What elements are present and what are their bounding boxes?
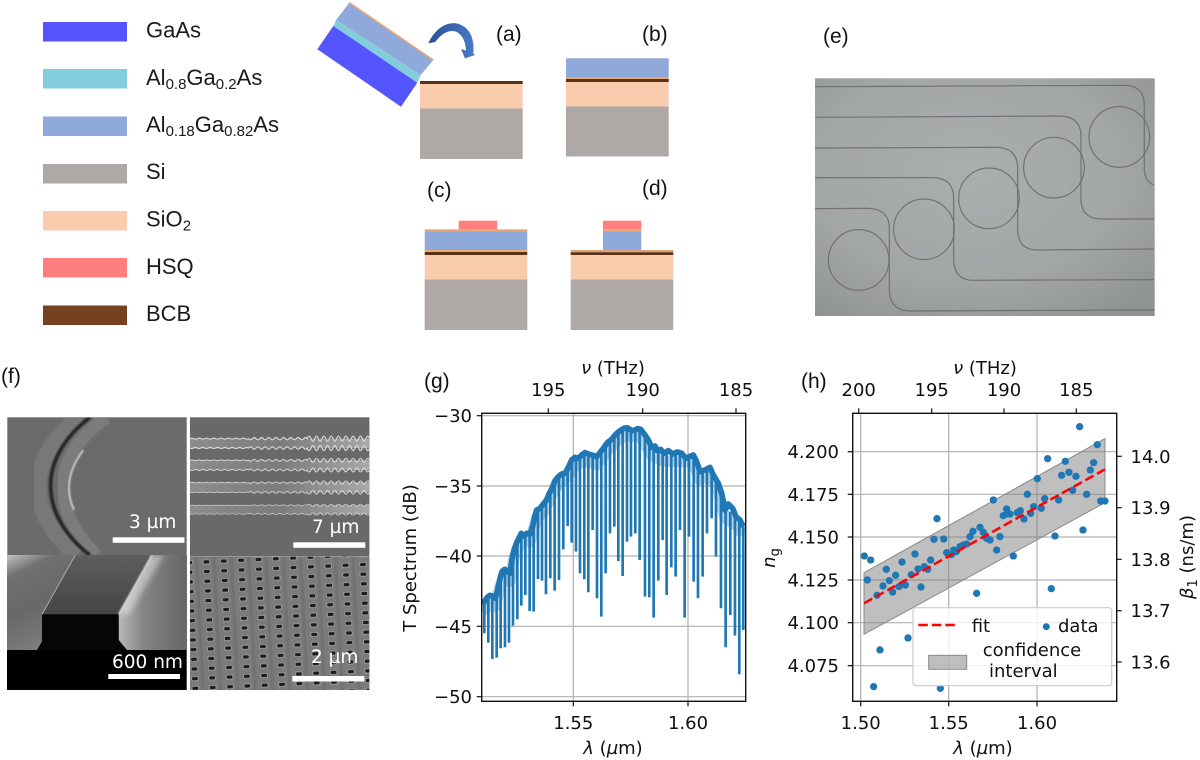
chart legend <box>913 608 1112 686</box>
x tick labels <box>531 380 753 734</box>
fit line <box>864 469 1105 603</box>
left tick labels: 4.150 <box>787 528 839 548</box>
axis label: wavelength: λ (µm) <box>582 738 643 759</box>
legend item: Si: Si <box>146 159 166 184</box>
ticks <box>477 408 736 706</box>
chart g: transmission spectrum <box>400 358 753 759</box>
y tick labels: −45 <box>434 617 472 638</box>
left tick labels: 4.175 <box>787 485 839 506</box>
data points <box>861 423 1109 692</box>
label f: (f) <box>1 365 21 388</box>
label d: (d) <box>642 177 668 200</box>
chart h: group index <box>759 358 1200 759</box>
SEM top right: corrugated waveguides <box>190 417 370 556</box>
legend item: Al0.18Ga0.82As: Ga <box>195 112 225 137</box>
legend item: HSQ <box>43 254 194 279</box>
y tick labels: −35 <box>434 476 472 498</box>
legend item: BCB <box>43 301 191 326</box>
axes frame <box>853 413 1117 701</box>
axis label: group index: n <box>759 556 780 568</box>
scale bar 600 nm: 600 nm <box>112 652 183 673</box>
scale bar 7 um: 7 µm <box>312 517 359 538</box>
chart legend: fit <box>972 616 990 637</box>
SEM top left: ring bend <box>7 417 187 555</box>
grid lines <box>853 413 1117 701</box>
legend item: Al0.8Ga0.2As: 0.8 <box>166 76 186 93</box>
grid lines <box>482 413 746 701</box>
legend item: BCB: BCB <box>146 301 191 326</box>
scale bar 2 um <box>292 647 364 682</box>
legend item: SiO2: 2 <box>183 218 191 235</box>
right tick labels: 14.0 <box>1130 447 1171 468</box>
legend item: GaAs <box>43 18 201 43</box>
left tick labels: 4.100 <box>787 613 839 634</box>
axes frame <box>482 413 746 701</box>
axis label: wavelength: λ (µm) <box>952 738 1013 759</box>
legend item: Al0.18Ga0.82As: Al <box>146 112 166 137</box>
tilted epitaxial stack <box>317 3 433 107</box>
x tick labels: 1.60 <box>1017 713 1057 734</box>
x tick labels: 185 <box>719 380 753 401</box>
legend item: SiO2: SiO <box>146 207 183 232</box>
confidence band <box>864 439 1105 634</box>
micrograph <box>815 78 1155 316</box>
axis label: frequency: ν (THz) <box>581 358 645 379</box>
legend item: Al0.18Ga0.82As: 0.18 <box>166 123 195 140</box>
right tick labels: 13.9 <box>1130 498 1171 519</box>
spectrum trace <box>483 428 743 674</box>
left tick labels: 4.200 <box>787 442 839 463</box>
right tick labels <box>1130 447 1171 674</box>
right tick labels: 13.8 <box>1130 550 1171 571</box>
legend item: Al0.18Ga0.82As <box>43 112 279 140</box>
legend item: Al0.8Ga0.2As <box>43 65 262 93</box>
axis label: group index: g <box>768 548 783 556</box>
panel b: bonded stack <box>566 23 669 156</box>
scale bar 2 um: 2 µm <box>311 647 358 668</box>
axis label: beta1: (ns/m) <box>1177 515 1198 579</box>
left tick labels: 4.125 <box>787 570 839 592</box>
legend item: HSQ: HSQ <box>146 254 194 279</box>
x tick labels: 195 <box>915 380 949 401</box>
icon: curved flip arrow <box>428 23 475 58</box>
legend item: Al0.8Ga0.2As: 0.2 <box>216 76 237 93</box>
substrate stack a <box>420 81 523 159</box>
plot data <box>861 423 1109 692</box>
ticks <box>848 408 1122 706</box>
x tick labels: 190 <box>626 380 660 401</box>
panel c: HSQ patterned stack <box>425 179 527 330</box>
chart legend: interval <box>989 661 1058 682</box>
y tick labels: −50 <box>434 687 472 708</box>
x tick labels: 195 <box>531 380 565 401</box>
stack d <box>571 221 673 330</box>
label e: (e) <box>823 25 849 48</box>
x tick labels: 1.50 <box>841 713 881 734</box>
panel e: microscope image of ring resonators <box>815 25 1155 316</box>
legend item: Al0.8Ga0.2As: Ga <box>186 65 217 90</box>
SEM bottom right: photonic crystal holes <box>190 557 369 690</box>
panel d: etched waveguide stack <box>571 177 673 330</box>
panel a: wafer bonding schematic <box>317 3 523 159</box>
legend item: GaAs: GaAs <box>146 18 201 43</box>
panel f: SEM images <box>1 365 370 690</box>
left tick labels: 4.075 <box>787 656 839 677</box>
legend item: Al0.8Ga0.2As: As <box>237 65 262 90</box>
y tick labels <box>434 406 472 708</box>
stack b <box>566 58 669 156</box>
chart legend: data <box>1058 616 1099 637</box>
legend item: Al0.18Ga0.82As: 0.82 <box>224 123 253 140</box>
label g: (g) <box>424 370 450 393</box>
left tick labels <box>787 442 839 677</box>
label a: (a) <box>496 23 522 46</box>
x tick labels: 200 <box>842 380 876 401</box>
label c: (c) <box>427 179 452 202</box>
stack c <box>425 221 527 330</box>
right tick labels: 13.7 <box>1130 601 1171 622</box>
label h: (h) <box>801 370 827 393</box>
axis label: beta1: β <box>1177 587 1198 600</box>
legend: materials <box>43 18 279 326</box>
scale bar 3 um <box>113 512 184 543</box>
x tick labels: 1.55 <box>553 713 593 734</box>
scale bar 3 um: 3 µm <box>129 512 176 533</box>
legend item: Al0.8Ga0.2As: Al <box>146 65 166 90</box>
x tick labels: 1.60 <box>668 713 708 734</box>
scale bar 7 um <box>293 517 365 548</box>
label b: (b) <box>642 23 668 46</box>
SEM bottom left: waveguide cross section <box>7 555 187 690</box>
x tick labels: 185 <box>1059 380 1093 401</box>
y tick labels: −30 <box>434 406 472 427</box>
chart legend: confidence <box>983 640 1081 661</box>
axis label: T spectrum: T Spectrum (dB) <box>400 484 421 633</box>
x tick labels: 190 <box>987 380 1021 401</box>
axis label: frequency: ν (THz) <box>953 358 1017 379</box>
legend item: SiO2 <box>43 207 191 235</box>
right tick labels: 13.6 <box>1130 652 1171 674</box>
x tick labels: 1.55 <box>929 713 969 734</box>
x tick labels <box>841 380 1093 734</box>
legend item: Si <box>43 159 166 184</box>
y tick labels: −40 <box>434 546 472 568</box>
legend item: Al0.18Ga0.82As: As <box>253 112 279 137</box>
